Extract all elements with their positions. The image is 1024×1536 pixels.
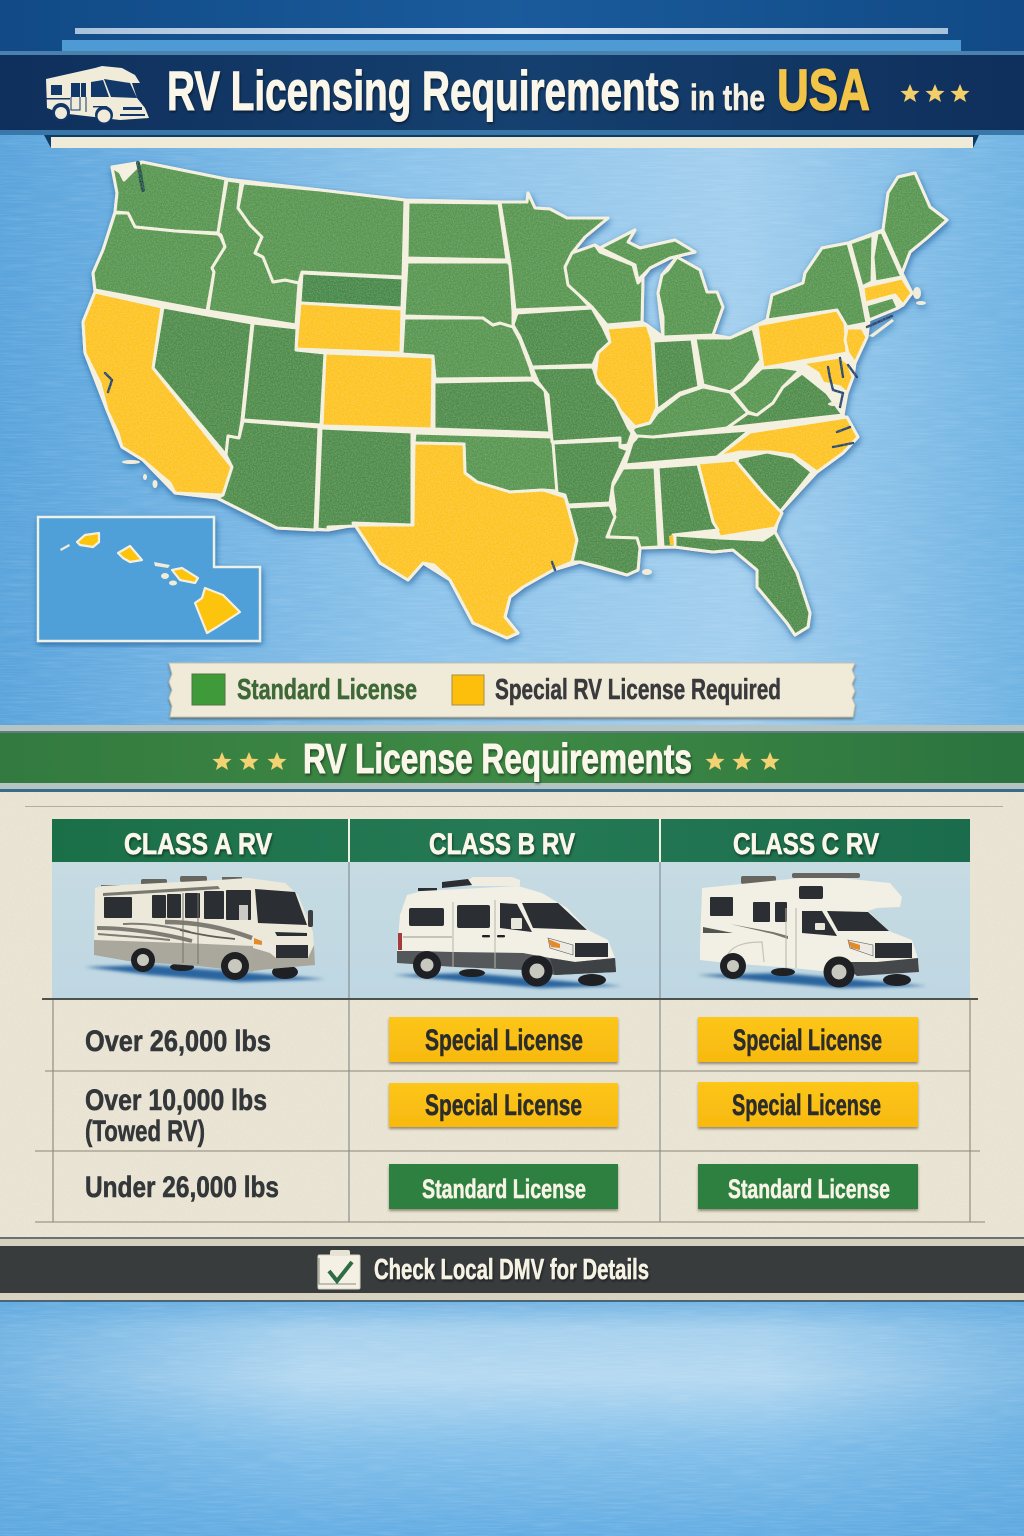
badge: class B standard: Standard License bbox=[422, 1174, 586, 1204]
state: South Carolina bbox=[737, 452, 812, 512]
title text: in the bbox=[690, 77, 765, 118]
section stars bbox=[212, 752, 780, 770]
row: over 10,000 lbs towed: (Towed RV) bbox=[85, 1115, 205, 1148]
state: Illinois bbox=[595, 325, 657, 427]
badge: class C special bbox=[698, 1017, 918, 1062]
state: Oklahoma bbox=[414, 433, 557, 492]
background: map area bbox=[0, 130, 1024, 740]
row: under 26,000 lbs: Under 26,000 lbs bbox=[85, 1171, 279, 1204]
state: New Hampshire bbox=[873, 232, 902, 282]
paper grain bbox=[0, 790, 1024, 1240]
state: Utah bbox=[243, 323, 325, 425]
badge: class C standard bbox=[698, 1164, 918, 1209]
icon: RV bbox=[46, 66, 149, 124]
state: Michigan upper peninsula bbox=[600, 230, 695, 280]
RV image row background bbox=[52, 862, 970, 999]
table header row: CLASS A RV bbox=[124, 828, 272, 861]
state: Maryland and Delaware bbox=[802, 357, 853, 393]
map silhouette backing bbox=[83, 162, 947, 638]
state: Arizona bbox=[217, 421, 319, 530]
state: Kentucky bbox=[632, 387, 748, 437]
badge: class C standard: Standard License bbox=[728, 1174, 890, 1204]
state: Idaho bbox=[208, 180, 299, 325]
badge: class B special bbox=[389, 1083, 618, 1127]
RV: Class A bbox=[85, 876, 325, 982]
background: lower water area bbox=[0, 1296, 1024, 1536]
state: Washington bbox=[112, 162, 226, 233]
row: over 10,000 lbs towed: Over 10,000 lbs bbox=[85, 1084, 267, 1117]
badge: class B special bbox=[389, 1017, 618, 1062]
state: Maine bbox=[883, 173, 947, 273]
grid lines bbox=[35, 819, 985, 1222]
state: New Jersey bbox=[845, 328, 867, 363]
state: New York bbox=[767, 243, 867, 327]
badge: class C special bbox=[698, 1082, 918, 1127]
section banner bbox=[0, 725, 1024, 792]
state: West Virginia bbox=[732, 367, 800, 415]
legend swatch: special bbox=[452, 675, 484, 705]
badge: class C special: Special License bbox=[732, 1089, 881, 1122]
state: Arkansas bbox=[553, 440, 628, 505]
legend label: standard: Standard License bbox=[237, 674, 417, 706]
state: Ohio bbox=[695, 328, 761, 392]
table bbox=[35, 819, 985, 1222]
state: Mississippi bbox=[608, 467, 659, 548]
state: Minnesota bbox=[500, 193, 608, 310]
title stars bbox=[900, 84, 970, 102]
state: North Dakota bbox=[407, 202, 507, 260]
legend bbox=[169, 663, 855, 717]
US map bbox=[83, 162, 947, 638]
state: Indiana bbox=[653, 339, 699, 410]
state: Georgia bbox=[698, 460, 782, 537]
state: Wisconsin bbox=[565, 245, 643, 325]
state: Nevada bbox=[153, 307, 252, 455]
state: Louisiana bbox=[568, 505, 640, 575]
state: Iowa bbox=[513, 308, 610, 367]
state: Virginia bbox=[727, 373, 843, 428]
state: Massachusetts bbox=[863, 278, 912, 305]
state: Connecticut and Rhode Island bbox=[866, 297, 898, 320]
row: over 26,000 lbs bbox=[85, 1017, 918, 1062]
state: Alabama bbox=[658, 464, 718, 547]
title text: USA bbox=[777, 58, 870, 123]
water inlets bbox=[105, 163, 892, 570]
state: New Mexico bbox=[317, 428, 412, 530]
legend label: special: Special RV License Required bbox=[495, 674, 781, 706]
title banner bbox=[0, 0, 1024, 148]
islands and coast details bbox=[122, 287, 926, 575]
footer bar bbox=[0, 1237, 1024, 1302]
state: Vermont bbox=[850, 235, 873, 287]
title text: RV Licensing Requirements bbox=[167, 59, 680, 122]
state: Tennessee bbox=[625, 430, 750, 465]
table header row: CLASS B RV bbox=[429, 828, 575, 861]
state: Pennsylvania bbox=[757, 310, 847, 368]
table header row: CLASS C RV bbox=[733, 828, 879, 861]
row: over 10,000 lbs towed bbox=[85, 1082, 918, 1148]
badge: class B standard bbox=[389, 1164, 618, 1209]
row: over 26,000 lbs: Over 26,000 lbs bbox=[85, 1025, 271, 1058]
state: Florida bbox=[675, 532, 810, 635]
RV: Class C bbox=[697, 873, 927, 988]
state: Missouri bbox=[532, 367, 632, 446]
row: under 26,000 lbs bbox=[85, 1164, 918, 1209]
badge: class C special: Special License bbox=[733, 1024, 882, 1057]
RV: Class B bbox=[393, 877, 622, 988]
state: Kansas bbox=[434, 380, 550, 433]
state: North Carolina bbox=[717, 417, 858, 472]
footer text: Check Local DMV for Details bbox=[374, 1254, 649, 1286]
state: California bbox=[83, 292, 232, 495]
state: Texas bbox=[355, 443, 577, 638]
section heading: RV License Requirements bbox=[303, 735, 692, 782]
state: Wyoming lower bbox=[296, 303, 402, 353]
state: Colorado bbox=[322, 353, 433, 429]
state: Montana bbox=[238, 183, 405, 283]
badge: class B special: Special License bbox=[425, 1024, 583, 1057]
table panel bbox=[0, 790, 1024, 1240]
Hawaii inset bbox=[38, 517, 260, 641]
state: Nebraska bbox=[402, 318, 533, 379]
state: South Dakota bbox=[404, 262, 513, 327]
legend swatch: standard bbox=[192, 674, 225, 705]
state: Wyoming upper bbox=[300, 273, 403, 308]
state: Michigan lower peninsula bbox=[658, 257, 723, 337]
badge: class B special: Special License bbox=[425, 1089, 582, 1122]
state: Oregon bbox=[93, 213, 225, 311]
table header row bbox=[52, 819, 970, 862]
icon: clipboard check bbox=[318, 1250, 360, 1289]
